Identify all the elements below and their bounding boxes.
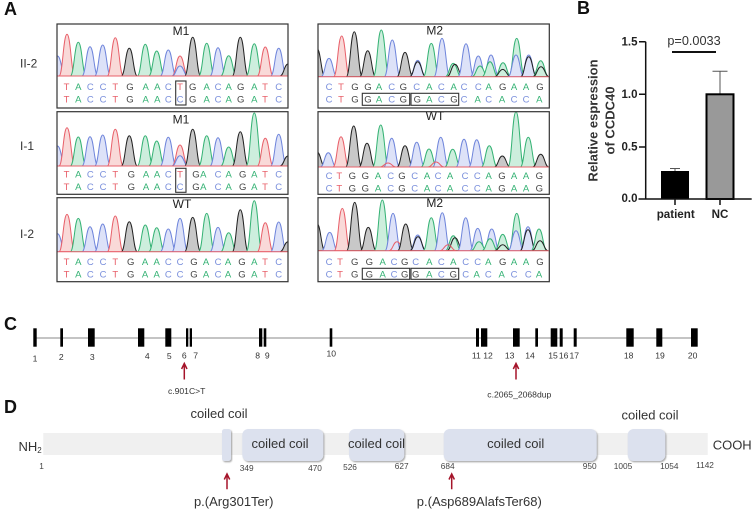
exon numbers: 3 (90, 352, 95, 362)
exon numbers: 8 (255, 350, 260, 360)
NH2 terminus: NH (18, 439, 37, 454)
residue numbers: 950 (583, 461, 597, 471)
exon numbers: 11 (472, 350, 481, 360)
exon numbers (33, 348, 698, 363)
chromatogram II-2 M2: C T GG A C GG A C G C A C A CC A (326, 94, 543, 105)
gene exon diagram (33, 328, 698, 363)
y tick labels: 1.0 (622, 89, 638, 101)
chromatogram I-2 WT: WT (173, 197, 192, 211)
exon numbers: 4 (145, 351, 150, 361)
row label I-1: I-1 (20, 139, 34, 153)
y axis title: of CCDC40 (602, 87, 618, 154)
x labels: NC (712, 208, 729, 221)
chromatogram I-2 M2: C T GG A C GG A C G C A C A CC A (326, 269, 543, 280)
label: p.(Arg301Ter): p.(Arg301Ter) (194, 494, 273, 509)
exon numbers: 6 (182, 350, 187, 360)
exon numbers: 9 (265, 350, 270, 360)
residue numbers: 1005 (614, 461, 633, 471)
chromatogram I-1 WT (309, 109, 549, 194)
domain labels: coiled coil (251, 436, 309, 451)
chromatogram I-2 M2 (309, 196, 549, 282)
exon numbers: 19 (655, 350, 665, 360)
exons (33, 328, 698, 347)
domain 4 (444, 429, 597, 461)
chromatogram I-1 M1: T A CC T G AA CC GA C A G A T C (64, 182, 282, 193)
label: c.2065_2068dup: c.2065_2068dup (487, 389, 552, 399)
bar: NC (706, 94, 734, 199)
chromatogram II-2 M2: M2 (426, 24, 443, 38)
label: c.901C>T: c.901C>T (168, 386, 206, 396)
chromatogram I-1 WT: C T GG A C G C A C A CC A G AA G (326, 171, 543, 182)
NH2 terminus: 2 (37, 446, 42, 455)
arrow: exon 6 variant (182, 364, 187, 380)
arrow: p.(Asp689AlafsTer68) (449, 474, 454, 489)
label: p.(Asp689AlafsTer68): p.(Asp689AlafsTer68) (417, 494, 542, 509)
residue numbers: 1142 (696, 460, 714, 470)
chromatogram I-2 M2: C T GG A C G C A C A CC A G AA G (326, 257, 544, 268)
residue numbers: 470 (308, 463, 322, 473)
domain labels: coiled coil (190, 406, 248, 421)
chromatogram II-2 M1: T A CC T G AA CC G A C A G A T C (64, 94, 282, 105)
bar: patient (661, 171, 689, 199)
exon numbers: 13 (505, 350, 515, 360)
arrow: p.(Arg301Ter) (224, 474, 230, 489)
chromatogram I-2 WT: T A CC T G AA CC G A C A G A T C (64, 257, 282, 268)
domain 2 (242, 429, 323, 461)
exon numbers: 7 (193, 350, 198, 360)
row label I-2: I-2 (20, 227, 34, 241)
axes (638, 42, 752, 205)
domain 5 (628, 429, 665, 461)
domain labels (190, 406, 679, 451)
exon numbers: 17 (570, 350, 579, 360)
x labels: patient (657, 208, 695, 221)
x labels (657, 208, 729, 221)
exon numbers: 18 (624, 350, 634, 360)
residue numbers: 684 (441, 461, 455, 471)
chromatogram II-2 M1 (50, 24, 296, 108)
exon numbers: 20 (688, 350, 698, 360)
bar chart: relative expression of CCDC40 (586, 34, 752, 221)
domain labels: coiled coil (621, 407, 679, 422)
residue numbers (39, 460, 714, 473)
domain labels: coiled coil (487, 436, 544, 451)
arrow: exon 13 variant (513, 364, 519, 380)
panel letter C: C (4, 314, 17, 334)
domain 3 (349, 429, 404, 461)
chromatogram II-2 M1: M1 (173, 24, 190, 38)
y tick labels: 0.5 (622, 142, 638, 154)
exon numbers: 2 (59, 352, 64, 362)
exon numbers: 15 (548, 350, 558, 360)
COOH terminus: COOH (713, 438, 752, 452)
exon numbers: 14 (525, 350, 535, 360)
residue numbers: 349 (240, 463, 254, 473)
domain 1 (222, 429, 231, 461)
y axis title: Relative espression (586, 59, 600, 182)
y tick labels: 0.0 (622, 193, 638, 205)
significance: p=0.0033 (667, 34, 721, 48)
chromatogram I-2 M2: M2 (426, 196, 443, 210)
exon numbers: 12 (483, 350, 493, 360)
row label II-2: II-2 (20, 57, 38, 71)
residue numbers: 526 (343, 462, 357, 472)
chromatogram II-2 M1: T A CC T G AA C T G A C A G A T C (64, 82, 282, 93)
protein backbone (43, 433, 708, 455)
exon numbers: 5 (167, 351, 172, 361)
exon numbers: 16 (559, 350, 569, 360)
chromatogram I-1 M1 (50, 112, 296, 194)
protein domain diagram (18, 406, 752, 473)
residue numbers: 1 (39, 461, 44, 471)
chromatogram II-2 M2: C T GG A C G C A C A CC A G AA G (326, 82, 544, 93)
residue numbers: 1054 (660, 461, 679, 471)
chromatogram I-2 WT: T A CC T G AA CC G A C A G A T C (64, 269, 282, 280)
exon numbers: 10 (327, 348, 336, 358)
chromatogram I-1 WT: WT (426, 109, 445, 123)
chromatogram I-1 M1: T A CC T G AA C T GA C A G A T C (64, 169, 282, 180)
chromatogram I-2 WT (50, 197, 296, 282)
y axis title (586, 59, 618, 182)
panel letter D: D (4, 397, 17, 417)
error bars (670, 71, 728, 171)
chromatogram I-1 WT: C T GG A C G C A C A CC A G AA G (326, 183, 543, 194)
domain labels: coiled coil (348, 436, 405, 451)
y tick labels: 1.5 (622, 37, 638, 49)
exon numbers: 1 (33, 353, 38, 363)
chromatogram II-2 M2 (309, 24, 549, 108)
chromatogram I-1 M1: M1 (173, 113, 190, 127)
residue numbers: 627 (395, 461, 409, 471)
y tick labels (622, 37, 638, 205)
